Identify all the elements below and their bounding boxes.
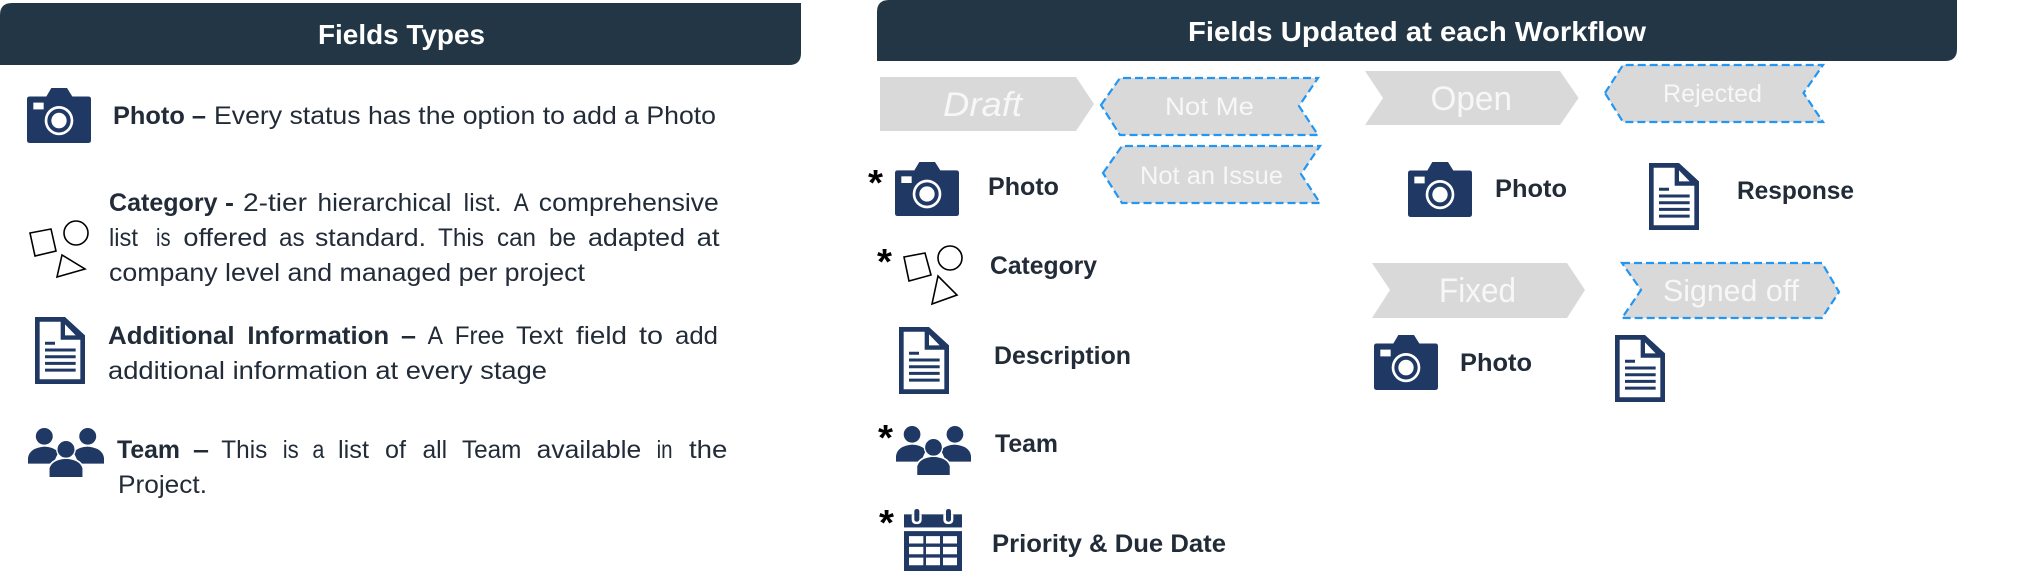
text block: Team: list <box>338 436 369 464</box>
text block: Team: the <box>689 436 727 464</box>
text block: Category: is <box>156 224 170 252</box>
status arrow: Not Me <box>1101 78 1318 135</box>
icon: team <box>28 428 104 478</box>
text block: Category: - <box>225 189 234 217</box>
required marker: * <box>878 417 893 458</box>
panel: Fields Updated at each Workflow <box>868 0 1957 571</box>
text block: Category: standard. <box>315 224 426 252</box>
icon: document <box>1615 335 1665 402</box>
status arrow: Rejected <box>1605 65 1823 122</box>
text block: Category: be <box>549 224 576 252</box>
text block: Additional Information: – <box>401 322 416 350</box>
status arrow: Open <box>1365 71 1579 125</box>
text block: Team <box>117 436 727 499</box>
text block: Team: Project. <box>118 471 207 499</box>
text block: Category: company level and managed per project <box>109 259 585 287</box>
header bar: Fields Types <box>0 3 801 65</box>
icon: camera <box>895 162 959 216</box>
icon: team <box>896 426 971 476</box>
header bar: Fields Updated at each Workflow <box>877 0 1957 61</box>
label: Photo: Photo <box>988 173 1059 201</box>
status arrow: Draft: Draft <box>943 86 1024 124</box>
text block: Category: can <box>497 224 536 252</box>
required marker: * <box>868 162 883 203</box>
icon: camera <box>1408 162 1472 217</box>
label: Team: Team <box>995 430 1058 458</box>
icon: camera <box>27 88 91 143</box>
text block: Team: This <box>221 436 267 464</box>
text block: Team: a <box>312 436 324 464</box>
icon: document <box>1649 163 1699 230</box>
text block: Additional Information: additional information at every stage <box>108 357 547 385</box>
status arrow: Not an Issue <box>1103 146 1320 203</box>
label: Photo: Photo <box>1460 349 1532 377</box>
status arrow: Signed off <box>1622 263 1839 318</box>
text block: Additional Information: Information <box>247 322 389 350</box>
label: Description: Description <box>994 342 1131 370</box>
required marker: * <box>879 502 894 543</box>
text block: Team: of <box>385 436 406 464</box>
icon: category shapes <box>30 221 88 277</box>
text block: Additional Information: to <box>639 322 663 350</box>
status arrow: Signed off: Signed off <box>1663 273 1799 308</box>
icon: calendar <box>904 509 962 571</box>
label: Photo: Photo <box>1495 175 1567 203</box>
status arrow: Open: Open <box>1430 80 1512 118</box>
required marker: * <box>877 241 892 282</box>
text block: Category: Category <box>109 189 218 217</box>
status arrow: Draft <box>880 77 1094 131</box>
text block: Team: Team <box>117 436 180 464</box>
text block: Additional Information: Text <box>516 322 563 350</box>
text block: Category: list. <box>464 189 502 217</box>
text block: Additional Information: Free <box>455 322 504 350</box>
text block: Category <box>109 189 720 287</box>
text block: Additional Information <box>108 322 718 385</box>
status arrow: Not Me: Not Me <box>1165 93 1254 121</box>
status arrow: Fixed <box>1372 263 1585 318</box>
text block: Team: available <box>537 436 641 464</box>
icon: camera <box>1374 335 1438 390</box>
label: Response: Response <box>1737 177 1854 205</box>
panel: Fields Types <box>0 3 801 499</box>
text block: Category: offered <box>183 224 267 252</box>
status arrow: Fixed: Fixed <box>1439 272 1516 310</box>
header bar: Fields Types: Fields Types <box>318 19 485 50</box>
text block: Category: This <box>438 224 484 252</box>
status arrow: Rejected: Rejected <box>1663 80 1762 108</box>
text block: Team: is <box>283 436 299 464</box>
text block: Photo: Every status has the option to add a Photo <box>214 102 716 130</box>
text block: Additional Information: add <box>675 322 718 350</box>
status arrow: Not an Issue: Not an Issue <box>1140 162 1283 190</box>
icon: document <box>35 317 85 384</box>
text block: Team: Team <box>462 436 521 464</box>
text block: Category: at <box>697 224 720 252</box>
label: Priority & Due Date: Priority & Due Date <box>992 530 1226 558</box>
text block: Team: in <box>657 436 673 464</box>
text block: Category: list <box>109 224 138 252</box>
header bar: Fields Updated at each Workflow: Fields Updated at each Workflow <box>1188 16 1646 47</box>
text block: Team: all <box>422 436 447 464</box>
text block: Photo: Photo – <box>113 102 206 130</box>
text block: Additional Information: A <box>428 322 443 350</box>
text block: Category: adapted <box>588 224 685 252</box>
text block: Additional Information: field <box>576 322 627 350</box>
text block: Category: comprehensive <box>539 189 719 217</box>
text block: Category: as <box>279 224 305 252</box>
text block: Category: A <box>514 189 529 217</box>
text block: Category: 2-tier <box>243 189 307 217</box>
icon: document <box>899 327 949 394</box>
text block: Team: – <box>193 436 209 464</box>
icon: category shapes <box>904 246 962 304</box>
label: Category: Category <box>990 252 1097 280</box>
text block: Category: hierarchical <box>318 189 452 217</box>
text block: Additional Information: Additional <box>108 322 235 350</box>
